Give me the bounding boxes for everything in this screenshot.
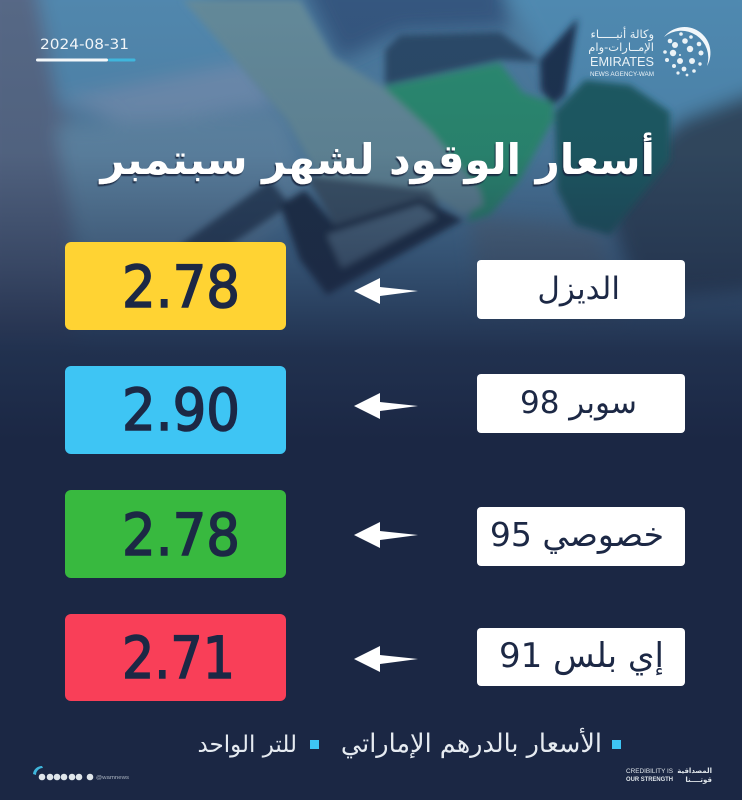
row: e-plus 91 <box>65 614 685 701</box>
label: diesel: الديزل <box>537 271 620 307</box>
label: super 98: سوبر 98 <box>520 385 637 421</box>
price card: e-plus 91: 2.71 <box>122 624 235 692</box>
logo globe emblem <box>663 27 710 76</box>
arrow: super 98 <box>354 393 418 419</box>
date stamp <box>36 37 136 62</box>
slogan: credibility is our strength: المصداقية <box>677 767 712 775</box>
label: special 95 <box>477 507 685 566</box>
price card: diesel: 2.78 <box>122 253 240 321</box>
row: special 95 <box>65 490 685 578</box>
price card: special 95 <box>65 490 286 578</box>
price card: e-plus 91 <box>65 614 286 701</box>
label: super 98 <box>477 374 685 433</box>
row: super 98 <box>65 366 685 454</box>
footnote: currency and unit <box>197 726 621 759</box>
footnote: currency and unit: الأسعار بالدرهم الإماراتي <box>341 726 602 759</box>
logo wordmark <box>588 26 654 78</box>
label: special 95: خصوصي 95 <box>490 515 664 554</box>
price card: super 98 <box>65 366 286 454</box>
date stamp: 2024-08-31 <box>40 37 129 53</box>
title: أسعار الوقود لشهر سبتمبر <box>98 132 655 185</box>
arrow: e-plus 91 <box>354 646 418 672</box>
label: e-plus 91: إي بلس 91 <box>499 636 664 676</box>
price card: super 98: 2.90 <box>122 376 240 444</box>
footnote: currency and unit: للتر الواحد <box>197 732 297 758</box>
arrow: diesel <box>354 278 418 304</box>
logo wordmark: وكالة أنبـــــاء <box>591 26 654 42</box>
logo wordmark: EMIRATES <box>590 54 654 69</box>
logo: Emirates News Agency <box>588 26 710 78</box>
logo wordmark: NEWS AGENCY-WAM <box>590 72 654 78</box>
price card: diesel <box>65 242 286 330</box>
price card: special 95: 2.78 <box>122 501 240 569</box>
social media handle <box>33 766 129 781</box>
slogan: credibility is our strength: CREDIBILITY IS <box>626 768 674 775</box>
arrow: special 95 <box>354 522 418 548</box>
social media handle: @wamnews <box>96 775 129 781</box>
label: diesel <box>477 260 685 319</box>
logo wordmark: الإمــارات-وام <box>588 40 654 55</box>
row: diesel <box>65 242 685 330</box>
label: e-plus 91 <box>477 628 685 686</box>
slogan: credibility is our strength: قوتــــنا <box>685 776 712 784</box>
slogan: credibility is our strength <box>626 767 712 784</box>
slogan: credibility is our strength: OUR STRENGTH <box>626 776 673 783</box>
